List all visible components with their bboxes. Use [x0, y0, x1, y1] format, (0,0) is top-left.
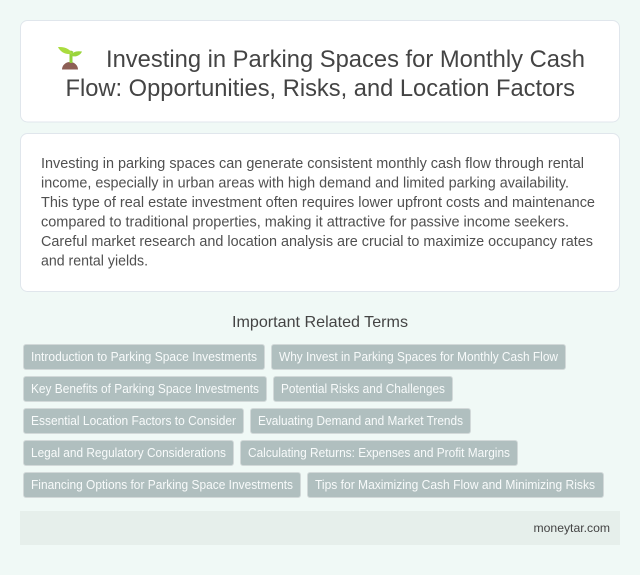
description text: compared to traditional properties, making it attractive for passive income seekers. — [41, 214, 569, 230]
tag: legal — [24, 440, 234, 466]
description text: Investing in parking spaces can generate consistent monthly cash flow through rental — [41, 156, 584, 172]
tag: potential risks: Potential Risks and Challenges — [281, 382, 445, 396]
panel: title card — [20, 20, 620, 122]
tag: introduction — [24, 344, 264, 370]
heading: related terms: Important Related Terms — [232, 314, 408, 331]
related terms tags — [24, 344, 604, 498]
description text: income, especially in urban areas with high demand and limited parking availability. — [41, 176, 569, 192]
footer site name: moneytar.com — [534, 521, 610, 535]
tag: key benefits: Key Benefits of Parking Space Investments — [31, 382, 259, 396]
tag: financing — [24, 472, 300, 498]
tag: why invest — [272, 344, 566, 370]
tag: location factors — [24, 408, 244, 434]
panel: description card — [20, 134, 620, 292]
tag: tips: Tips for Maximizing Cash Flow and Minimizing Risks — [315, 478, 595, 492]
tag: tips — [308, 472, 604, 498]
icon: sprout — [58, 47, 82, 70]
tag: introduction: Introduction to Parking Space Investments — [31, 350, 257, 364]
description text: This type of real estate investment often requires lower upfront costs and maintenance — [41, 195, 595, 211]
title text: Investing in Parking Spaces for Monthly Cash — [106, 46, 585, 73]
tag: demand and trends — [250, 408, 470, 434]
footer bar — [20, 511, 620, 545]
title text — [66, 46, 585, 102]
tag: calculating returns — [240, 440, 518, 466]
tag: calculating returns: Calculating Returns: Expenses and Profit Margins — [248, 446, 510, 460]
tag: potential risks — [274, 376, 452, 402]
description text — [41, 156, 595, 270]
tag: location factors: Essential Location Factors to Consider — [31, 414, 236, 428]
title text: Flow: Opportunities, Risks, and Location Factors — [66, 75, 575, 102]
tag: financing: Financing Options for Parking Space Investments — [31, 478, 293, 492]
tag: why invest: Why Invest in Parking Spaces for Monthly Cash Flow — [279, 350, 559, 364]
description text: Careful market research and location analysis are crucial to maximize occupancy rates — [41, 234, 593, 250]
tag: key benefits — [24, 376, 266, 402]
tag: legal: Legal and Regulatory Considerations — [31, 446, 226, 460]
description text: and rental yields. — [41, 254, 148, 270]
tag: demand and trends: Evaluating Demand and Market Trends — [258, 414, 463, 428]
